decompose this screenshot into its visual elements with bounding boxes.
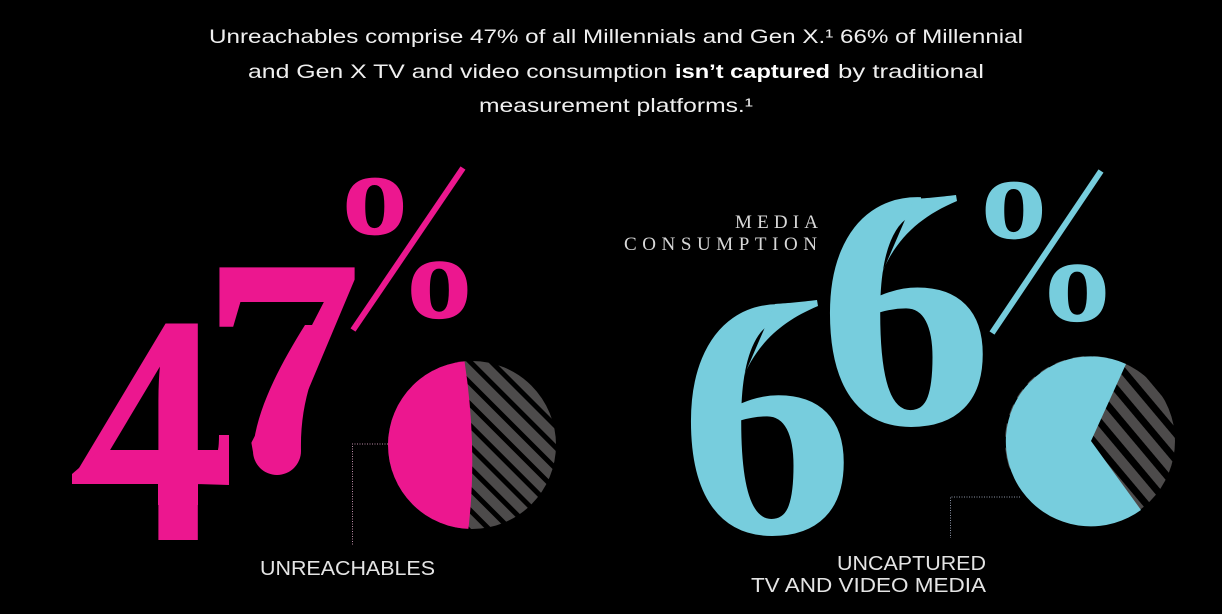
big number 47%: 4 — [73, 247, 223, 612]
intro text: measurement platforms.¹ — [479, 95, 754, 117]
big number 66%: 6 — [818, 119, 993, 498]
leader line: uncaptured — [950, 497, 1020, 538]
intro text — [209, 26, 1023, 117]
big number 66%: % — [967, 145, 1145, 323]
label: unreachables: UNREACHABLES — [260, 558, 435, 580]
big number 47% — [72, 166, 468, 540]
label: uncaptured tv and video media: TV AND VIDEO MEDIA — [751, 575, 987, 597]
intro text: isn’t captured — [675, 61, 830, 83]
intro text: Unreachables comprise 47% of all Millennials and Gen X.¹ 66% of Millennial — [209, 26, 1023, 48]
big number 66%: % — [945, 179, 1122, 355]
big number 47%: 7 — [201, 194, 363, 544]
pie chart: 66% — [1005, 356, 1175, 526]
label: media consumption: CONSUMPTION — [624, 234, 817, 255]
panel: 66% media consumption — [624, 169, 1175, 592]
pie chart: 47% — [388, 361, 556, 529]
big number 47%: % — [307, 176, 484, 352]
label: uncaptured tv and video media — [751, 553, 987, 597]
intro text: and Gen X TV and video consumption — [248, 61, 667, 83]
label: media consumption — [624, 212, 818, 255]
panel: 47% unreachables — [72, 166, 556, 575]
intro text: by traditional — [838, 61, 984, 83]
label: uncaptured tv and video media: UNCAPTURED — [837, 553, 986, 575]
big number 66% — [690, 169, 1106, 536]
big number 47%: % — [328, 141, 506, 319]
big number 66%: 6 — [679, 226, 854, 608]
label: media consumption: MEDIA — [735, 212, 818, 233]
leader line: unreachables — [352, 444, 388, 546]
